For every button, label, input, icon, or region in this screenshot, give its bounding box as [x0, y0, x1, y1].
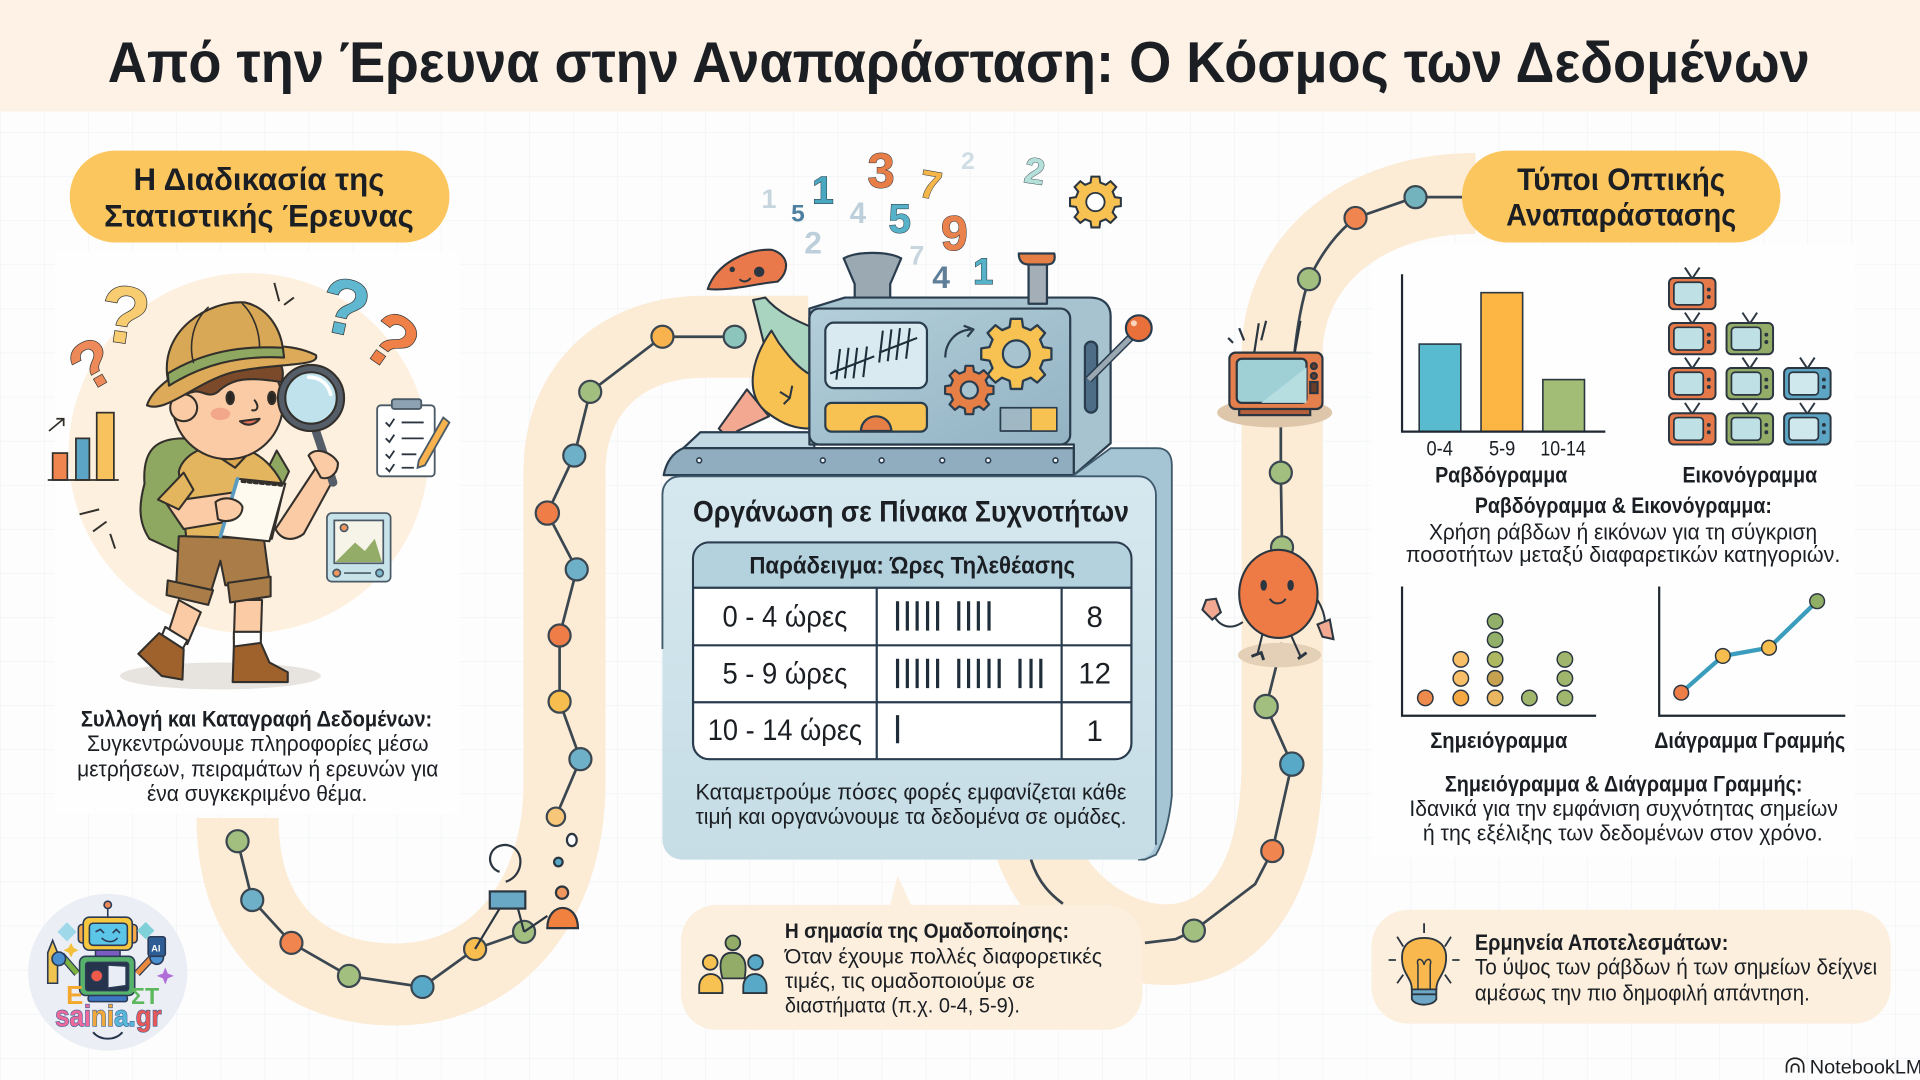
icon: floating gear — [1070, 177, 1121, 227]
title band: Από την Έρευνα στην Αναπαράσταση: Ο Κόσμος των Δεδομένων — [108, 31, 1810, 95]
frequency table grid: 0 - 4 ώρες — [722, 600, 847, 633]
heading pill: process — [70, 151, 449, 242]
floating numbers: 1 — [973, 251, 993, 292]
callout: grouping: διαστήματα (π.χ. 0-4, 5-9). — [785, 994, 1020, 1018]
icon: people group — [699, 936, 767, 993]
icon: question marks: ? — [94, 268, 155, 364]
floating numbers: 5 — [889, 196, 911, 242]
icon: retro TV on path — [1217, 321, 1332, 427]
line chart — [1654, 587, 1845, 753]
icon: question marks: ? — [348, 293, 434, 390]
bar chart: 5-9 — [1489, 437, 1515, 461]
panel: frequency table: Οργάνωση σε Πίνακα Συχνοτήτων — [693, 496, 1129, 529]
watermark: NotebookLM: NotebookLM — [1810, 1056, 1920, 1078]
icon: thinking figure on chain — [475, 834, 578, 949]
small gear — [945, 366, 994, 414]
text: data collection: ένα συγκεκριμένο θέμα. — [147, 781, 367, 806]
callout: grouping: Η σημασία της Ομαδοποίησης: — [785, 919, 1069, 943]
callout: grouping — [681, 876, 1142, 1030]
text: data collection — [77, 707, 439, 806]
data chain: right — [1031, 186, 1463, 943]
pictogram: Εικονόγραμμα — [1682, 462, 1818, 487]
panel: frequency table — [662, 448, 1172, 860]
line chart: Διάγραμμα Γραμμής — [1654, 728, 1845, 753]
floating numbers: 4 — [850, 197, 867, 230]
bar chart: 10-14 — [1540, 437, 1586, 461]
big gear — [981, 319, 1051, 389]
callout: grouping: Όταν έχουμε πολλές διαφορετικές — [784, 945, 1102, 969]
floating numbers: 9 — [941, 207, 968, 261]
icon: clipboard with pencil — [377, 399, 449, 476]
floating numbers: 4 — [932, 259, 950, 295]
heading pill: process: Στατιστικής Έρευνας — [104, 198, 414, 234]
frequency table grid: 5 - 9 ώρες — [722, 657, 847, 690]
icon: question marks — [56, 259, 434, 407]
text: dot plot and line chart — [1409, 772, 1838, 846]
floating numbers: 2 — [804, 224, 822, 260]
logo: sainia.gr robot: Ε — [66, 982, 83, 1010]
connector below machine — [1031, 860, 1063, 904]
funnel — [844, 253, 901, 302]
floating numbers: 2 — [961, 148, 975, 175]
dot plot: Σημειόγραμμα — [1430, 728, 1568, 753]
icon: small bar chart — [48, 413, 119, 480]
floating numbers: 7 — [916, 163, 945, 209]
white backing panels — [55, 245, 1855, 857]
heading pill: visual types — [1462, 151, 1780, 242]
frequency table grid: Παράδειγμα: Ώρες Τηλεθέασης — [749, 553, 1075, 580]
icon: question marks: ? — [313, 259, 378, 355]
callout: interpretation — [1371, 910, 1891, 1024]
text: data collection: Συγκεντρώνουμε πληροφορίες μέσω — [87, 731, 429, 756]
callout: interpretation: αμέσως την πιο δημοφιλή απάντηση. — [1475, 980, 1810, 1005]
data chain: left — [227, 326, 746, 998]
logo: sainia.gr robot: ΣΤ — [131, 983, 159, 1009]
text: data collection: Συλλογή και Καταγραφή Δεδομένων: — [81, 707, 432, 732]
illustration: counting machine — [664, 253, 1152, 475]
text: bar chart and pictogram: Χρήση ράβδων ή εικόνων για τη σύγκριση — [1429, 519, 1817, 544]
frequency table grid: 12 — [1078, 657, 1111, 690]
logo: sainia.gr robot — [28, 894, 187, 1051]
panel: frequency table: τιμή και οργανώνουμε τα δεδομένα σε ομάδες. — [696, 804, 1127, 829]
floating numbers — [761, 144, 1048, 295]
frequency table grid: 10 - 14 ώρες — [708, 714, 862, 747]
text: dot plot and line chart: ή της εξέλιξης των δεδομένων στον χρόνο. — [1423, 821, 1823, 846]
logo: sainia.gr robot: sainia.gr — [55, 1000, 162, 1033]
icon: image tablet — [327, 513, 391, 582]
panel: frequency table: Καταμετρούμε πόσες φορές εμφανίζεται κάθε — [696, 780, 1127, 805]
dot plot — [1402, 587, 1596, 753]
text: bar chart and pictogram: ποσοτήτων μεταξύ διαφαρετικών κατηγοριών. — [1406, 542, 1840, 567]
floating numbers: 3 — [868, 144, 895, 198]
icon: light bulb — [1389, 923, 1460, 1005]
floating numbers: 1 — [761, 184, 776, 214]
logo: sainia.gr robot: AI — [151, 943, 160, 953]
callout: interpretation: Ερμηνεία Αποτελεσμάτων: — [1475, 930, 1728, 955]
floating numbers: 7 — [909, 240, 924, 270]
frequency table grid: 1 — [1087, 715, 1103, 748]
bar chart — [1402, 274, 1605, 487]
frequency table grid — [693, 542, 1131, 759]
callout: interpretation: Το ύψος των ράβδων ή των σημείων δείχνει — [1475, 955, 1877, 980]
icon: rays around boy — [80, 283, 294, 549]
pictogram — [1669, 268, 1831, 487]
floating numbers: 5 — [791, 201, 805, 228]
bar chart: 0-4 — [1427, 437, 1453, 461]
text: bar chart and pictogram — [1406, 493, 1840, 567]
callout: grouping: τιμές, τις ομαδοποιούμε σε — [785, 969, 1035, 993]
frequency table grid: 8 — [1087, 601, 1103, 634]
illustration: explorer boy — [69, 273, 429, 689]
illustration: data blobs entering machine — [708, 250, 814, 441]
title band — [0, 0, 1920, 111]
ribbon path: right — [1035, 193, 1476, 945]
floating numbers: 2 — [1022, 149, 1048, 193]
heading pill: visual types: Τύποι Οπτικής — [1517, 161, 1725, 197]
text: bar chart and pictogram: Ραβδόγραμμα & Εικονόγραμμα: — [1475, 493, 1772, 518]
text: dot plot and line chart: Ιδανικά για την εμφάνιση συχνότητας σημείων — [1409, 796, 1838, 821]
text: dot plot and line chart: Σημειόγραμμα & Διάγραμμα Γραμμής: — [1445, 772, 1802, 797]
floating numbers: 1 — [812, 169, 834, 212]
ribbon path: left — [238, 337, 808, 984]
character: orange ball mascot — [1202, 550, 1333, 667]
heading pill: visual types: Αναπαράστασης — [1506, 196, 1736, 232]
icon: question marks: ? — [56, 323, 128, 407]
heading pill: process: Η Διαδικασία της — [133, 161, 384, 197]
bar chart: Ραβδόγραμμα — [1435, 462, 1568, 487]
text: data collection: μετρήσεων, πειραμάτων ή ερευνών για — [77, 756, 439, 781]
